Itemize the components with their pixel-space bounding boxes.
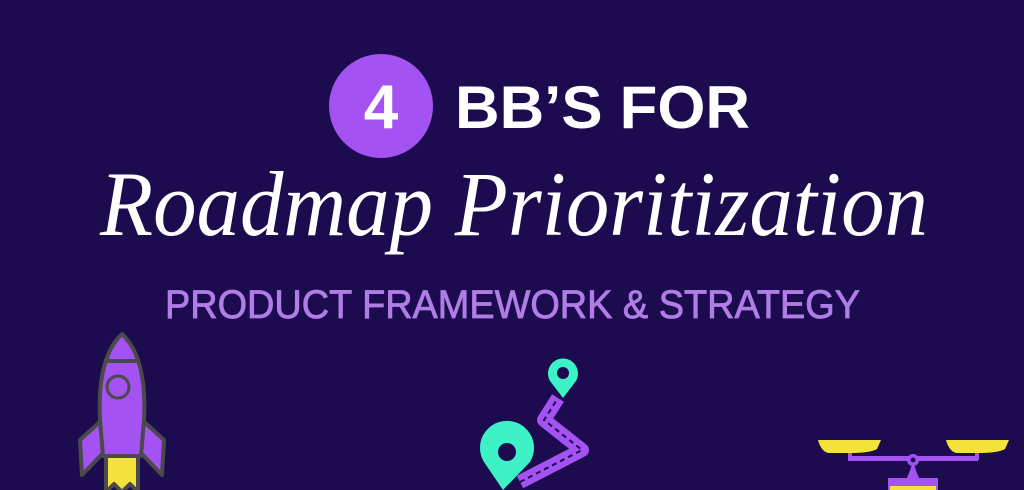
subtitle: PRODUCT FRAMEWORK & STRATEGY (165, 283, 860, 327)
icon: map route (480, 359, 582, 490)
number badge (329, 54, 433, 158)
number badge: 4 (364, 73, 399, 142)
icon: rocket (80, 334, 164, 490)
icon: balance scale (818, 440, 1009, 490)
heading: Roadmap Prioritization: Roadmap Prioritization (99, 153, 928, 255)
heading: BB'S FOR: BB’S FOR (455, 74, 750, 141)
title (99, 54, 928, 255)
